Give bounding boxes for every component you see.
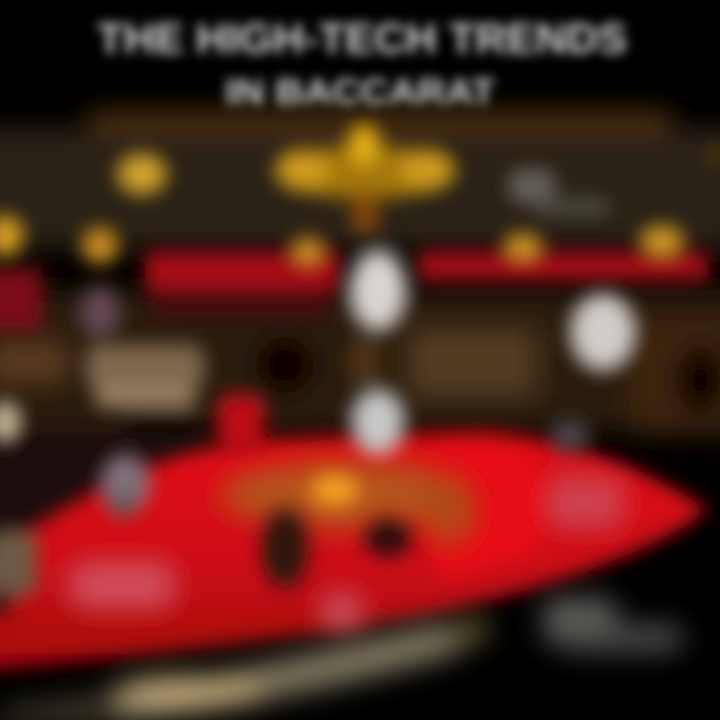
dark chips on table: [261, 508, 412, 588]
title: [97, 15, 627, 112]
grey wall sign: [510, 170, 610, 216]
grey caption smudge: [544, 598, 682, 652]
red upright marker: [218, 395, 264, 451]
table centre glow: [220, 461, 476, 546]
chandelier: [275, 124, 455, 232]
background wall: [0, 112, 720, 535]
title: THE HIGH-TECH TRENDS: [97, 15, 627, 63]
white glasses and figures: [350, 250, 635, 454]
left seat cards: [80, 286, 204, 517]
lower floor highlight: [0, 616, 490, 720]
wall lamps: [0, 145, 720, 266]
table felt: [0, 432, 708, 672]
table text smudges: [70, 476, 624, 630]
red banquette band: [0, 252, 708, 330]
title: IN BACCARAT: [225, 71, 495, 112]
left edge player: [0, 402, 36, 614]
